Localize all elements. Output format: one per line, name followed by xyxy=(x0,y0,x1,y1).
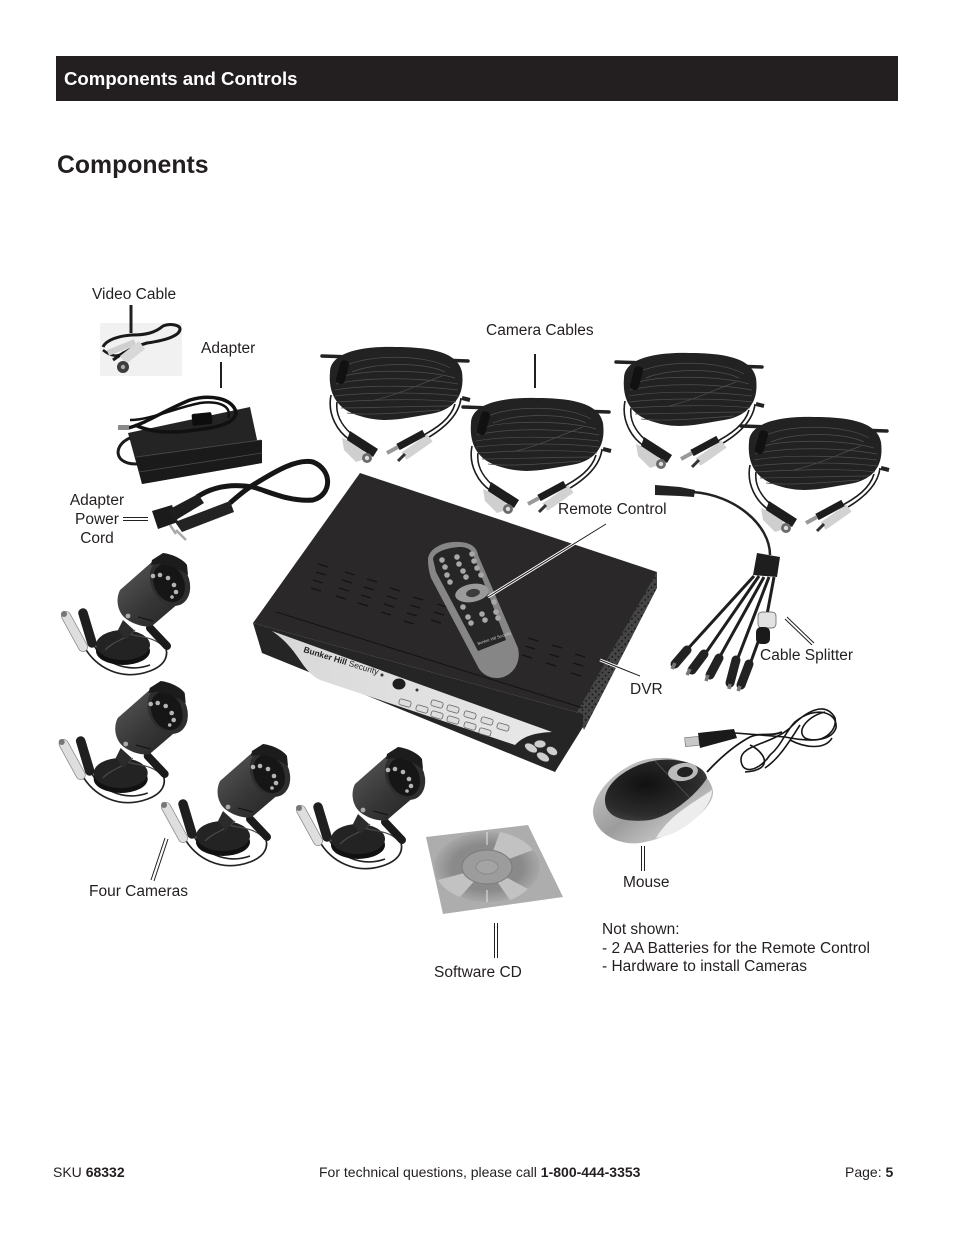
DVR power button xyxy=(392,678,406,690)
label: Camera Cables: Camera Cables xyxy=(486,322,594,339)
not shown note: Not shown: xyxy=(602,921,680,938)
DVR indicator lights xyxy=(380,674,418,692)
not shown note xyxy=(602,921,870,975)
video cable photo xyxy=(100,323,182,376)
software CD xyxy=(426,825,563,914)
label: Four Cameras: Four Cameras xyxy=(89,883,188,900)
four cameras xyxy=(59,551,433,869)
DVR top face xyxy=(253,473,657,714)
label: Adapter Power Cord: Adapter xyxy=(70,492,124,509)
heading: Components: Components xyxy=(57,152,209,179)
label: Adapter Power Cord: Power xyxy=(75,511,119,528)
camera cable coils xyxy=(322,347,889,533)
mouse xyxy=(593,709,836,843)
footer xyxy=(53,1164,893,1180)
remote brand: Bunker Hill Security xyxy=(477,630,512,646)
label: Adapter Power Cord xyxy=(70,492,124,547)
cable splitter xyxy=(655,485,780,691)
label: Software CD: Software CD xyxy=(434,964,522,981)
DVR silver panel xyxy=(272,631,552,745)
remote control xyxy=(428,542,519,678)
label: Remote Control: Remote Control xyxy=(558,501,667,518)
footer SKU: SKU 68332 xyxy=(53,1164,125,1180)
DVR front buttons xyxy=(398,698,510,737)
label: Mouse: Mouse xyxy=(623,874,670,891)
DVR direction pad xyxy=(523,740,559,764)
not shown note: - Hardware to install Cameras xyxy=(602,958,807,975)
header bar xyxy=(56,56,898,101)
DVR xyxy=(253,473,657,772)
label: Adapter Power Cord: Cord xyxy=(80,530,114,547)
not shown note: - 2 AA Batteries for the Remote Control xyxy=(602,940,870,957)
label: Video Cable: Video Cable xyxy=(92,286,176,303)
footer technical support: For technical questions, please call 1-800-444-3353 xyxy=(319,1164,641,1180)
DVR front xyxy=(253,623,583,772)
vents on lid xyxy=(311,564,585,676)
leader lines xyxy=(123,305,814,958)
header title: Components and Controls xyxy=(64,68,297,89)
adapter xyxy=(118,397,262,484)
adapter power cord xyxy=(152,461,328,540)
DVR right side xyxy=(577,572,657,730)
footer page number: Page: 5 xyxy=(845,1164,893,1180)
label: DVR: DVR xyxy=(630,681,663,698)
DVR brand: Bunker Hill Security xyxy=(302,644,381,677)
label: Cable Splitter: Cable Splitter xyxy=(760,647,853,664)
label: Adapter: Adapter xyxy=(201,340,255,357)
